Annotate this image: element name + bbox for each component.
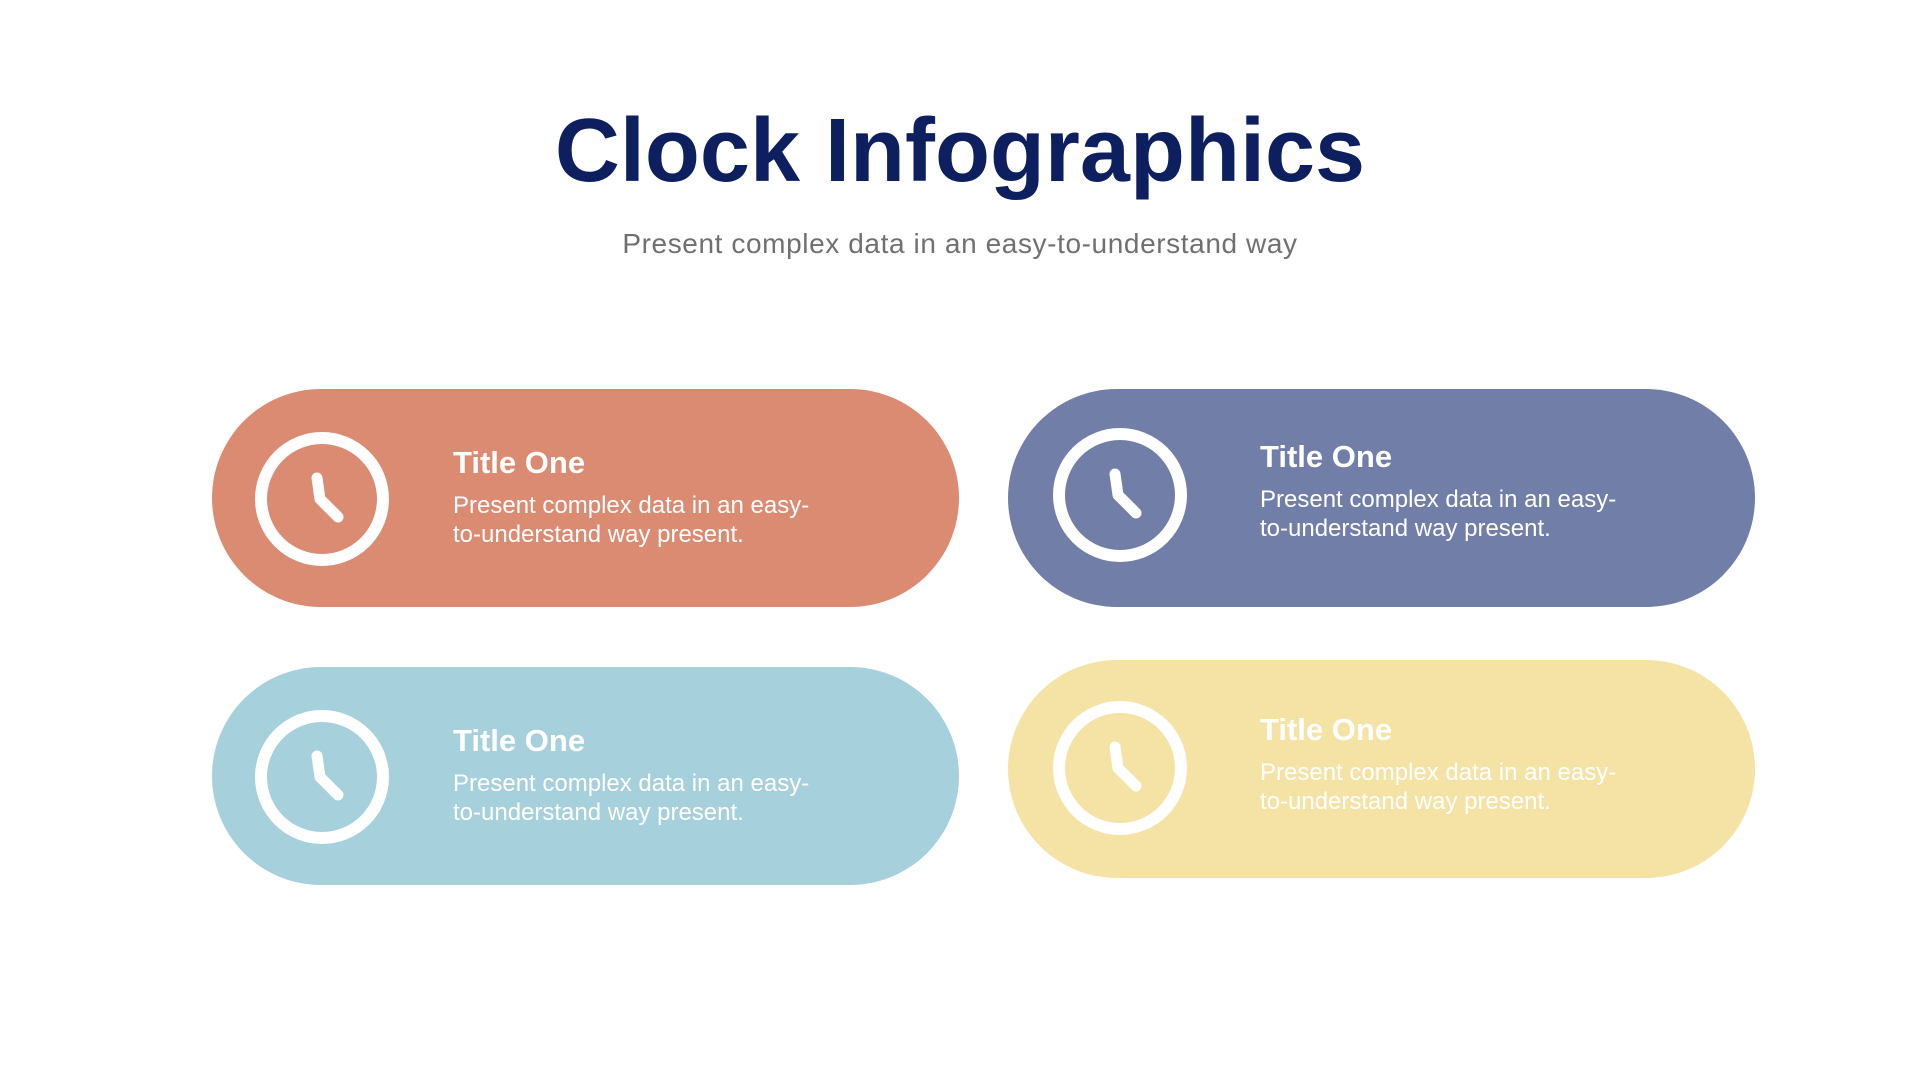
panel: light blue — [212, 667, 959, 885]
icon: clock — [255, 710, 389, 844]
panel: blue — [1008, 389, 1755, 607]
text: Present complex data in an easy- — [453, 492, 809, 519]
text: Present complex data in an easy- — [1260, 759, 1616, 786]
title: Clock Infographics — [555, 101, 1365, 201]
icon: clock — [255, 432, 389, 566]
text: to-understand way present. — [453, 799, 744, 826]
text: Present complex data in an easy- — [453, 770, 809, 797]
heading: Title One — [1260, 712, 1392, 747]
heading: Title One — [453, 445, 585, 480]
heading: Title One — [453, 723, 585, 758]
panel: orange — [212, 389, 959, 607]
panel: yellow — [1008, 660, 1755, 878]
text: to-understand way present. — [1260, 515, 1551, 542]
subtitle: Present complex data in an easy-to-understand way — [622, 228, 1298, 259]
text: to-understand way present. — [1260, 788, 1551, 815]
text — [1260, 486, 1616, 542]
text: Present complex data in an easy- — [1260, 486, 1616, 513]
text — [453, 492, 809, 548]
icon: clock — [1053, 428, 1187, 562]
text: to-understand way present. — [453, 521, 744, 548]
heading: Title One — [1260, 439, 1392, 474]
icon: clock — [1053, 701, 1187, 835]
text — [1260, 759, 1616, 815]
text — [453, 770, 809, 826]
